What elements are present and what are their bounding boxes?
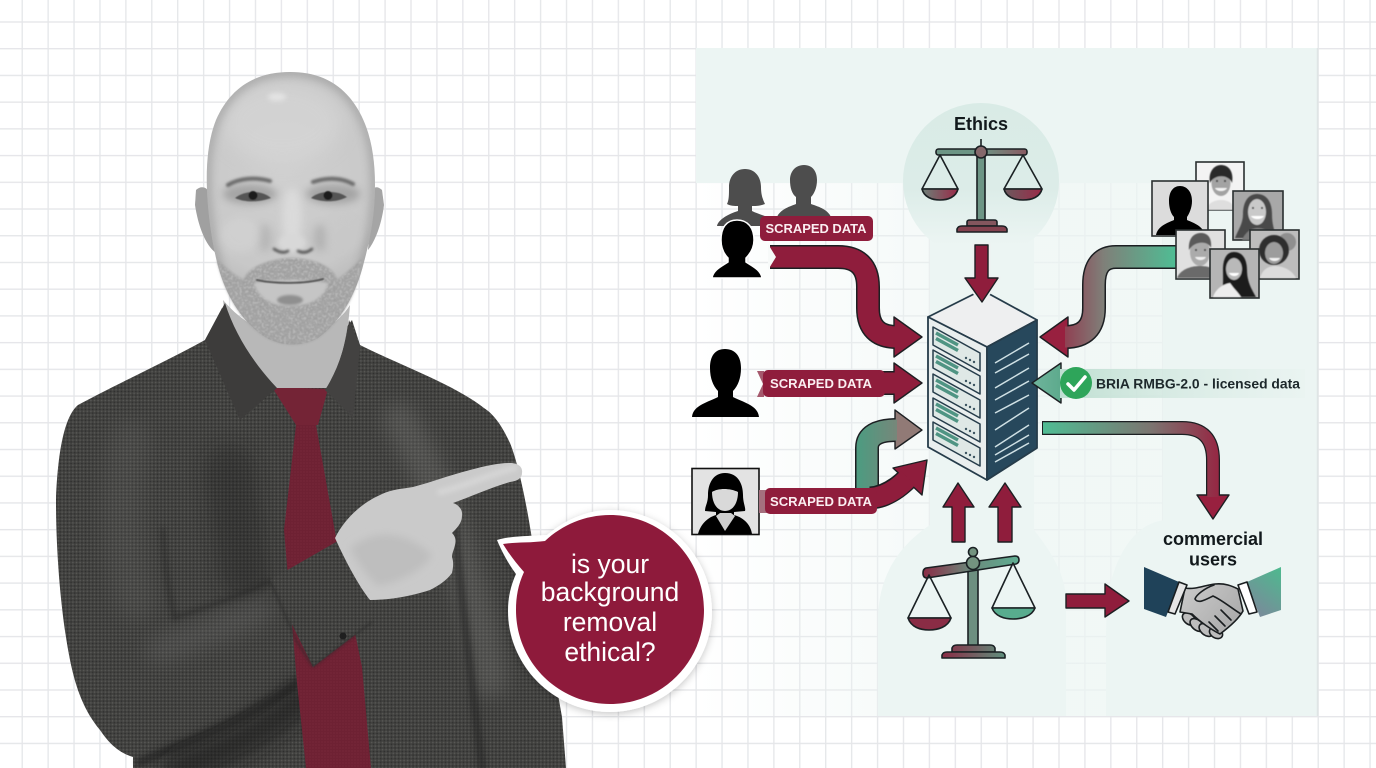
eyebrows (228, 179, 353, 185)
arrow: ethics into server (965, 245, 998, 302)
icon: black silhouette two (692, 349, 759, 417)
icon: tilted balance scale (908, 548, 1035, 658)
speech bubble text (541, 549, 679, 667)
photo: woman with long hair (1210, 249, 1259, 298)
speech bubble text: background (541, 577, 679, 607)
icon: top ethics scale (922, 114, 1042, 232)
label: scraped data bottom (759, 488, 877, 514)
label: scraped data middle: SCRAPED DATA (770, 377, 872, 391)
photo: woman with glasses (1233, 191, 1283, 240)
eyes (235, 191, 347, 201)
icon: server stack (928, 290, 1037, 480)
speech bubble (497, 510, 712, 712)
icon: green check badge (1060, 367, 1092, 399)
curled fingers (1180, 610, 1225, 641)
heading: commercial users: users (1189, 550, 1237, 570)
face shading (206, 72, 375, 294)
panel: ethics diagram background (696, 48, 1318, 716)
forearm sleeve cuff (270, 538, 372, 667)
photo: curly-haired woman (1250, 230, 1299, 279)
photo: man in t-shirt (1176, 230, 1225, 279)
ethics circle backdrop (903, 103, 1059, 259)
pointing hand (335, 463, 522, 600)
icon: framed woman portrait (692, 468, 759, 534)
beard (217, 258, 362, 344)
mouth (257, 279, 323, 283)
icon: black silhouette one (712, 220, 762, 278)
label: scraped data middle (757, 370, 885, 397)
ears (195, 187, 216, 253)
callout: BRIA RMBG-2.0 licensed data: BRIA RMBG-2.0 - licensed data (1096, 376, 1300, 392)
photo collage: licensed contributors (1152, 162, 1299, 298)
speech bubble text: is your (571, 549, 649, 579)
arrow: licensed return green to server (867, 410, 922, 492)
icon: gray woman silhouette (717, 169, 771, 226)
head (207, 72, 375, 344)
heading: commercial users: commercial (1163, 529, 1263, 549)
heading: commercial users (1163, 529, 1263, 570)
arrow: scraped data bottom (870, 460, 927, 498)
arrow: licensed photos to server (1040, 257, 1177, 357)
neck (223, 300, 350, 388)
icon: handshake (1144, 567, 1281, 641)
arrows: two upward arrows into server (943, 483, 1021, 542)
label: scraped data bottom: SCRAPED DATA (770, 495, 872, 509)
arrow: licensed data (1032, 363, 1061, 403)
collar (205, 303, 277, 420)
nose (274, 234, 312, 252)
icons: scraped people silhouettes (692, 165, 831, 534)
speech bubble text: ethical? (564, 637, 656, 667)
necktie (284, 425, 371, 768)
server slots (933, 327, 980, 466)
person: man pointing at speech bubble (56, 72, 566, 768)
callout: BRIA RMBG-2.0 licensed data (1060, 367, 1305, 399)
shirt (56, 308, 566, 768)
photo: silhouette (1152, 181, 1208, 236)
speech bubble text: removal (563, 607, 657, 637)
shirt shading and folds (123, 420, 490, 768)
arrow: server to commercial users (1042, 428, 1229, 519)
arrow: scraped data top (768, 244, 922, 357)
cuff button (340, 632, 346, 640)
label: scraped data top (760, 216, 873, 241)
arrow: scraped data middle (800, 363, 922, 403)
label: scraped data top: SCRAPED DATA (766, 222, 866, 236)
photo: smiling man (1196, 162, 1244, 210)
arrow: scale to handshake (1066, 584, 1129, 617)
server side vents (995, 343, 1029, 462)
icon: gray man silhouette (777, 165, 831, 217)
heading: Ethics: Ethics (954, 114, 1008, 134)
